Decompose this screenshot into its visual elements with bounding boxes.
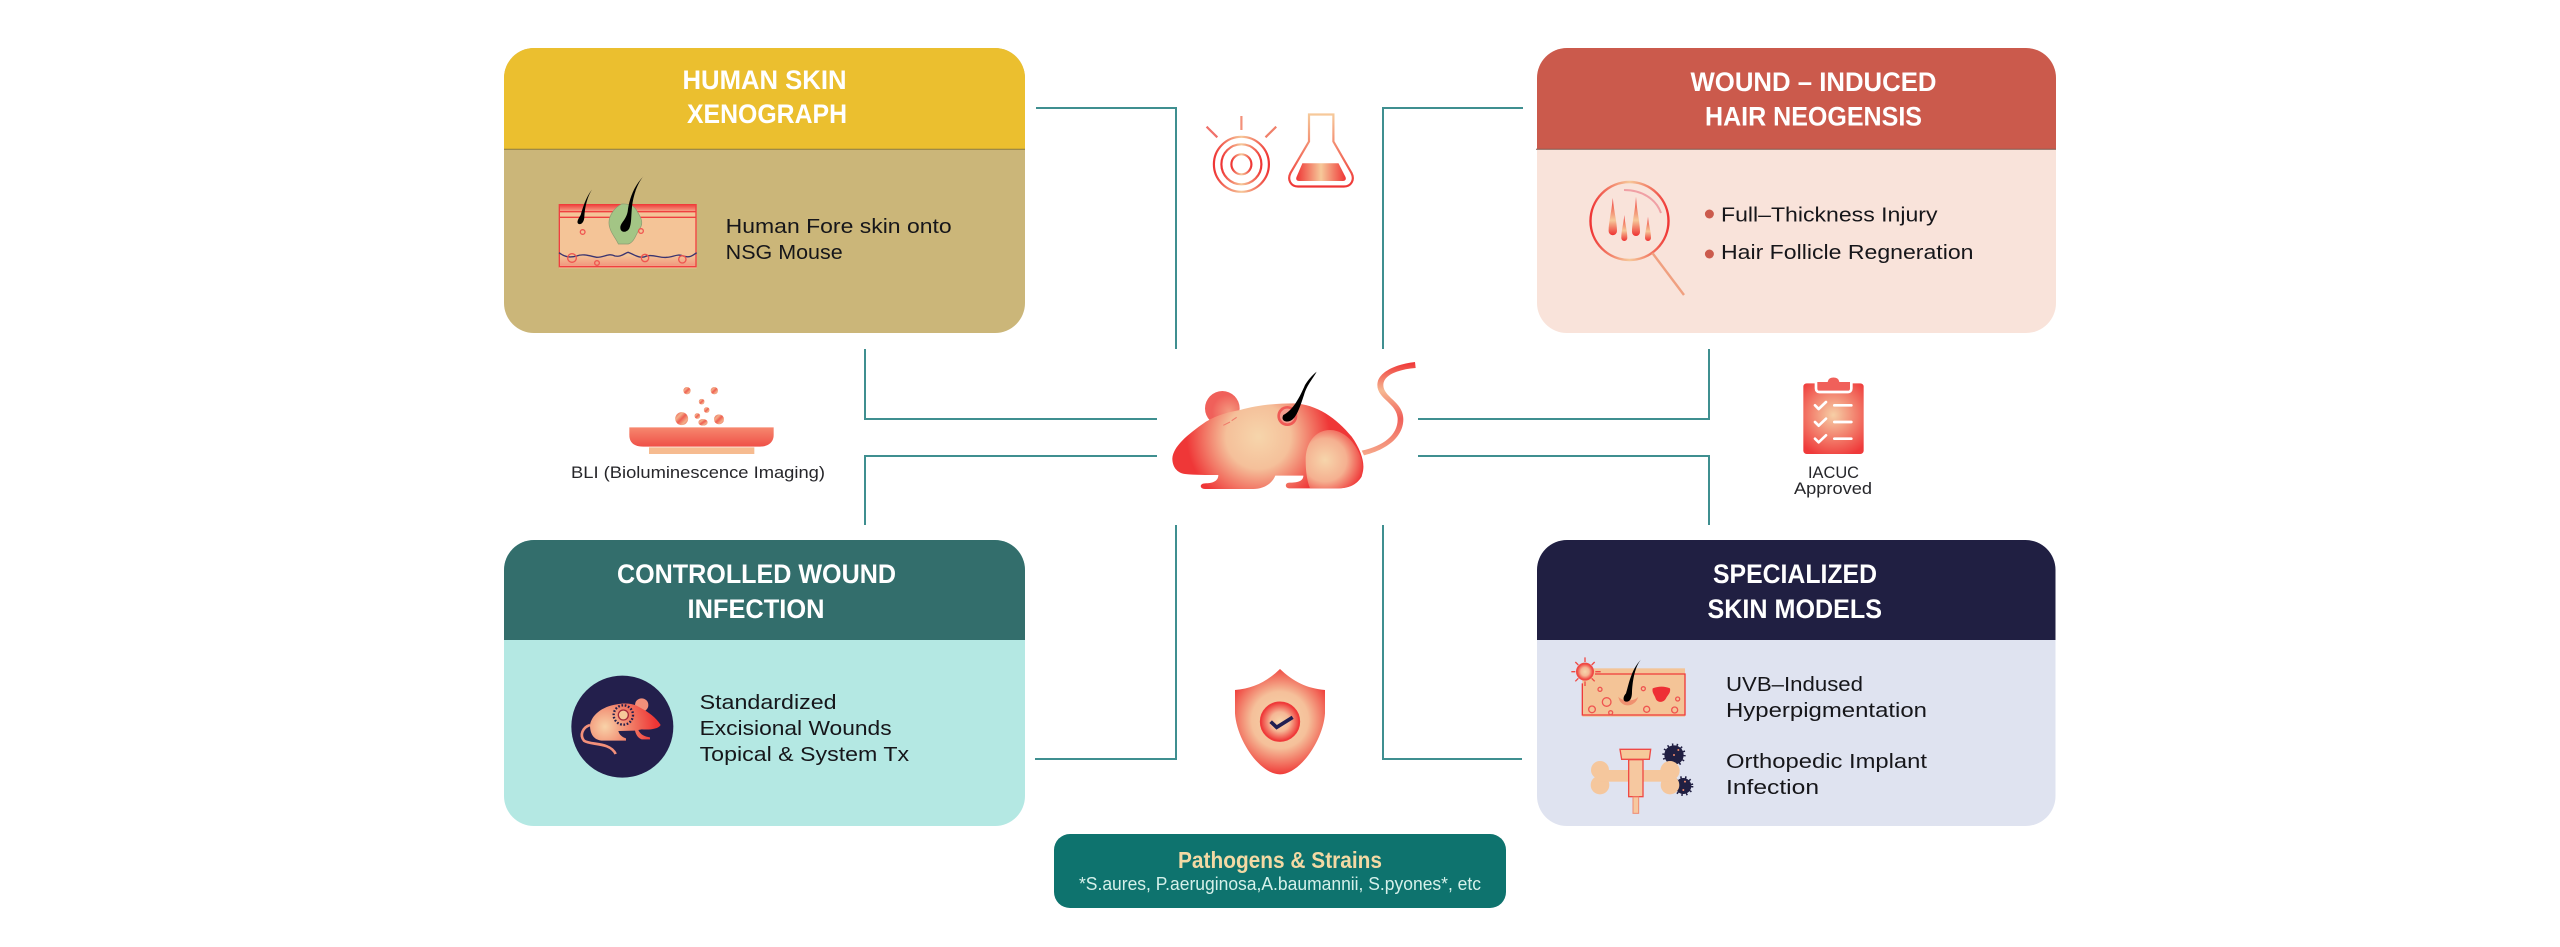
connector: lower left to mouse [865,456,1157,525]
connector: upper right to mouse [1418,349,1709,419]
bullet list [1705,204,1974,264]
panel body [504,540,1025,826]
icon: infected mouse [571,676,673,778]
callout text: *S.aures, P.aeruginosa,A.baumannii, S.pyones*, etc [1079,874,1481,894]
callout box [1054,834,1506,908]
heading: CONTROLLED WOUND [617,559,896,589]
connector: lower right to mouse [1418,456,1709,525]
text: Standardized [700,691,837,714]
heading: SKIN MODELS [1708,594,1882,624]
icon: flask [1289,114,1353,186]
text: Topical & System Tx [700,743,910,766]
text: Excisional Wounds [700,717,892,740]
panel header [1537,540,2056,640]
icon: bone implant [1591,745,1691,813]
panel body [1537,540,2056,826]
heading: WOUND – INDUCED [1690,67,1936,97]
heading: HUMAN SKIN [682,65,846,95]
text: Hyperpigmentation [1726,699,1927,722]
callout: pathogens and strains [1054,834,1506,908]
connector: top right [1383,108,1523,349]
label: IACUC approved: Approved [1794,479,1872,498]
icon: mouse [1172,362,1416,489]
panel header [1537,48,2056,149]
connector: bottom left [1035,525,1176,759]
icon: magnifier with follicles [1590,182,1684,295]
panel: wound induced hair neogenesis [1536,48,2056,333]
text: Orthopedic Implant [1726,750,1927,773]
bullet list: Hair Follicle Regneration [1721,241,1974,264]
text: Human Fore skin onto [726,215,952,238]
icon: skin graft [559,176,697,268]
panel body [1537,48,2056,333]
heading: HAIR NEOGENSIS [1705,102,1922,132]
text: Infection [1726,776,1819,799]
connector: bottom right [1383,525,1522,759]
label: IACUC approved: IACUC [1808,463,1859,482]
icon: culture dish [629,387,774,454]
panel body [504,48,1025,333]
bullet list: Full–Thickness Injury [1721,204,1938,227]
panel header [504,540,1025,640]
icon: shield [1235,669,1325,774]
connector: upper left to mouse [865,349,1157,419]
icon: UVB skin [1571,657,1685,717]
panel: controlled wound infection [504,540,1025,826]
icon: target [1207,116,1276,192]
panel: human skin xenograph [504,48,1025,333]
icon: clipboard [1803,376,1864,454]
label: BLI: BLI (Bioluminescence Imaging) [571,463,825,482]
heading: XENOGRAPH [687,99,847,129]
text: NSG Mouse [726,241,843,264]
text: UVB–Indused [1726,673,1863,696]
panel header [504,48,1025,149]
heading: INFECTION [688,594,824,624]
connector: top left [1036,108,1176,349]
heading: SPECIALIZED [1713,559,1877,589]
callout title: Pathogens & Strains [1178,847,1382,873]
panel: specialized skin models [1537,540,2056,826]
